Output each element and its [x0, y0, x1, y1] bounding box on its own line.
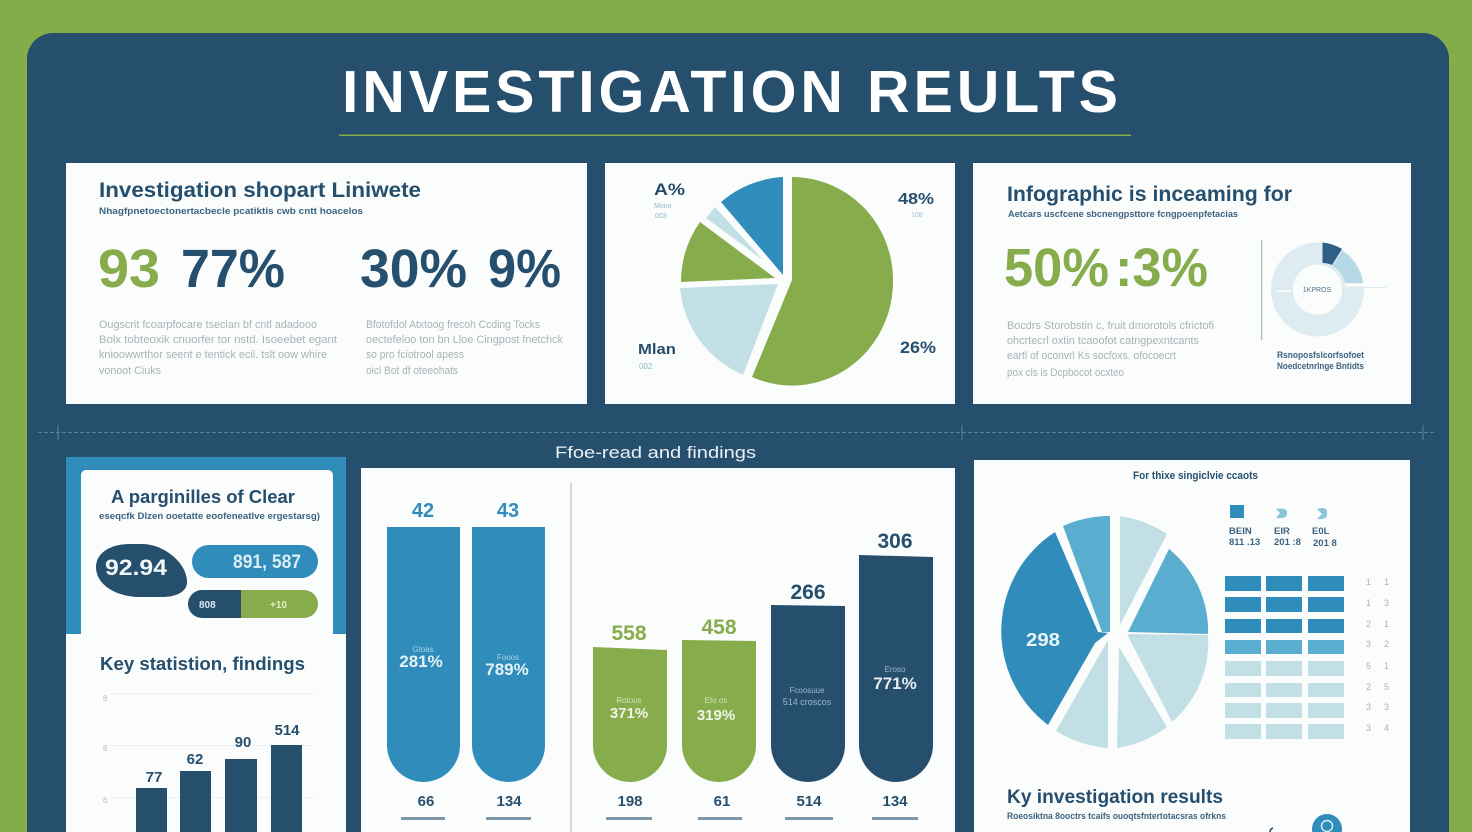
- bottom column labels: 61: [714, 793, 730, 810]
- panel subheading: Aetcars uscfcene sbcnengpsttore fcngpoenpfetacias: [1008, 209, 1238, 220]
- table row numbers: 1: [1384, 619, 1389, 629]
- pie labels: A%: [654, 180, 685, 199]
- body text: [1007, 320, 1214, 379]
- navy columns: Eroso: [885, 665, 906, 674]
- pie labels: 108: [911, 212, 923, 219]
- stat pill: 891, 587: [233, 552, 301, 573]
- big numbers: 50%: [1004, 238, 1109, 298]
- body text: pox cls is Dcpbocot ocxteo: [1007, 367, 1124, 379]
- panel subheading: Nhagfpnetoectonertacbecle pcatiktis cwb cntt hoacelos: [99, 206, 363, 217]
- vertical divider: [1261, 240, 1262, 340]
- table row numbers: 3: [1384, 598, 1389, 608]
- panel: investigation statistics: [66, 163, 587, 404]
- navy columns: 306: [877, 530, 913, 553]
- pie labels: 26%: [900, 338, 936, 357]
- panel heading: Infographic is inceaming for: [1007, 183, 1292, 206]
- table row numbers: 3: [1366, 723, 1371, 733]
- big numbers: :3%: [1115, 238, 1208, 298]
- body text left: Ougscrit fcoarpfocare tsecian bf cntl adadooo: [99, 319, 317, 331]
- body text: eartl of oconvrl Ks socfoxs. ofocoecrt: [1007, 350, 1176, 362]
- legend: 201 8: [1313, 538, 1337, 549]
- body text: Bocdrs Storobstin c, fruit dmorotols cfrictofi: [1007, 320, 1214, 332]
- panel: column chart: [361, 468, 955, 832]
- navy columns: 771%: [873, 674, 917, 693]
- bottom column labels: 134: [882, 793, 908, 810]
- table row numbers: 4: [1384, 723, 1389, 733]
- donut caption: Noedcetnrlnge Bntidts: [1277, 361, 1364, 372]
- title: INVESTIGATION REULTS: [342, 59, 1118, 125]
- split pill: 808: [199, 600, 216, 611]
- stat blob: [96, 544, 187, 597]
- table row numbers: 2: [1366, 619, 1371, 629]
- pie labels: 002: [639, 362, 653, 371]
- bottom column labels: 134: [496, 793, 522, 810]
- panel: clear percentages and key statistics: [66, 457, 346, 832]
- donut chart: 1KPROS: [1303, 287, 1332, 294]
- table row numbers: 5: [1384, 682, 1389, 692]
- bottom column labels: [418, 793, 908, 810]
- small bar chart: 6: [103, 796, 108, 805]
- table row numbers: 2: [1366, 682, 1371, 692]
- blue columns: Fooos: [497, 653, 519, 662]
- results subheading: Roeosiktna 8ooctrs tcaifs ouoqtsfntertotacsras ofrkns: [1007, 811, 1226, 822]
- green columns: 371%: [610, 705, 648, 722]
- legend: EIR: [1274, 526, 1290, 537]
- body text right: [366, 319, 563, 377]
- blue columns: 42: [412, 500, 434, 522]
- stat blob: 92.94: [105, 555, 168, 580]
- panel: key investigation results: [974, 460, 1410, 832]
- table row numbers: 5: [1366, 661, 1371, 671]
- green columns: 319%: [697, 707, 735, 724]
- section heading: Ffoe-read and findings: [555, 443, 756, 462]
- pie labels: [638, 180, 936, 371]
- blue columns: 281%: [399, 652, 443, 671]
- donut chart: [1277, 242, 1387, 326]
- pie labels: Mono: [654, 203, 672, 210]
- split pill: [188, 590, 318, 618]
- bottom column labels: 198: [617, 793, 643, 810]
- big numbers: [1004, 238, 1208, 298]
- green columns: 458: [701, 616, 737, 639]
- pie slices: [680, 177, 893, 386]
- legend: E0L: [1312, 526, 1330, 537]
- icon: person badge: [1270, 814, 1342, 832]
- body text right: so pro fciotrool apess: [366, 349, 464, 361]
- card subheading: eseqcfk Dlzen ooetatte eoofeneatlve ergestarsg): [99, 511, 320, 522]
- navy columns: [771, 530, 933, 782]
- donut caption: Rsnoposfslcorfsofoet: [1277, 350, 1365, 361]
- small bar chart: 62: [187, 751, 203, 768]
- small bar chart: 8: [103, 694, 108, 703]
- table row numbers: [1366, 577, 1389, 733]
- table row numbers: 3: [1384, 702, 1389, 712]
- big numbers: 9%: [488, 239, 561, 299]
- body text left: Bolx tobteoxik cnuorfer tor nstd. Isoeebet egant: [99, 334, 337, 346]
- table row numbers: 1: [1366, 577, 1371, 587]
- dashed section divider: [38, 425, 1436, 440]
- small bar chart: [103, 694, 315, 832]
- pie labels: Mlan: [638, 341, 676, 358]
- table grid: [1225, 576, 1344, 739]
- split pill: +10: [270, 600, 287, 611]
- green columns: 558: [611, 622, 647, 645]
- lower heading: Key statistion, findings: [100, 654, 305, 674]
- chart heading: For thixe singiclvie ccaots: [1133, 470, 1258, 482]
- green columns: Eto os: [705, 696, 727, 705]
- donut caption: [1277, 350, 1365, 372]
- small bar chart: 8: [103, 744, 108, 753]
- blue columns: Gtoas: [412, 645, 434, 654]
- table row numbers: 2: [1384, 639, 1389, 649]
- legend: 811 .13: [1229, 537, 1260, 548]
- big numbers: 30%: [360, 239, 467, 299]
- card heading: A parginilles of Clear: [111, 487, 295, 507]
- stat pill: [192, 545, 318, 578]
- blue columns: 789%: [485, 660, 529, 679]
- table row numbers: 1: [1384, 661, 1389, 671]
- big numbers: 93: [98, 239, 160, 299]
- small bar chart: 90: [235, 734, 251, 751]
- legend: [1229, 505, 1337, 549]
- small bar chart: 77: [146, 769, 162, 786]
- green columns: Rotous: [616, 696, 642, 705]
- bottom column labels: 514: [796, 793, 822, 810]
- green columns: [593, 616, 756, 782]
- table row numbers: 3: [1366, 639, 1371, 649]
- body text: ohcrtecrl oxtin tcaoofot catngpexntcants: [1007, 335, 1199, 347]
- big numbers: [98, 239, 561, 299]
- blue columns: [387, 500, 545, 782]
- legend: BEIN: [1229, 526, 1252, 537]
- table row numbers: 3: [1366, 702, 1371, 712]
- big numbers: 77%: [181, 239, 285, 299]
- bottom column underlines: [401, 817, 918, 820]
- body text left: knioowwrthor seent e tentick ecil. tslt oow whire: [99, 349, 327, 361]
- body text right: oicl Bot df oteeohats: [366, 365, 458, 377]
- table row numbers: 1: [1384, 577, 1389, 587]
- pie labels: 48%: [898, 191, 934, 208]
- blue columns: 43: [497, 500, 519, 522]
- segmented pie: [1001, 516, 1208, 748]
- pie labels: 003: [655, 213, 667, 220]
- body text right: oectefeloo ton bn Lloe Cingpost fnetchck: [366, 334, 563, 346]
- body text left: vonoot Ciuks: [99, 365, 161, 377]
- navy columns: Fcoosuue: [789, 686, 825, 695]
- legend: 201 :8: [1274, 537, 1301, 548]
- navy columns: 266: [790, 581, 826, 604]
- table row numbers: 1: [1366, 598, 1371, 608]
- body text left: [99, 319, 337, 377]
- bottom column labels: 66: [418, 793, 434, 810]
- small bar chart: 514: [274, 722, 300, 739]
- panel: pie chart: [605, 163, 955, 404]
- results heading: Ky investigation results: [1007, 787, 1223, 808]
- panel: infographic summary: [973, 163, 1411, 404]
- panel heading: Investigation shopart Liniwete: [99, 179, 421, 202]
- navy columns: 514 croscos: [783, 697, 832, 707]
- body text right: Bfotofdol Atxtoog frecoh Ccding Tocks: [366, 319, 540, 331]
- segmented pie: 298: [1026, 630, 1060, 650]
